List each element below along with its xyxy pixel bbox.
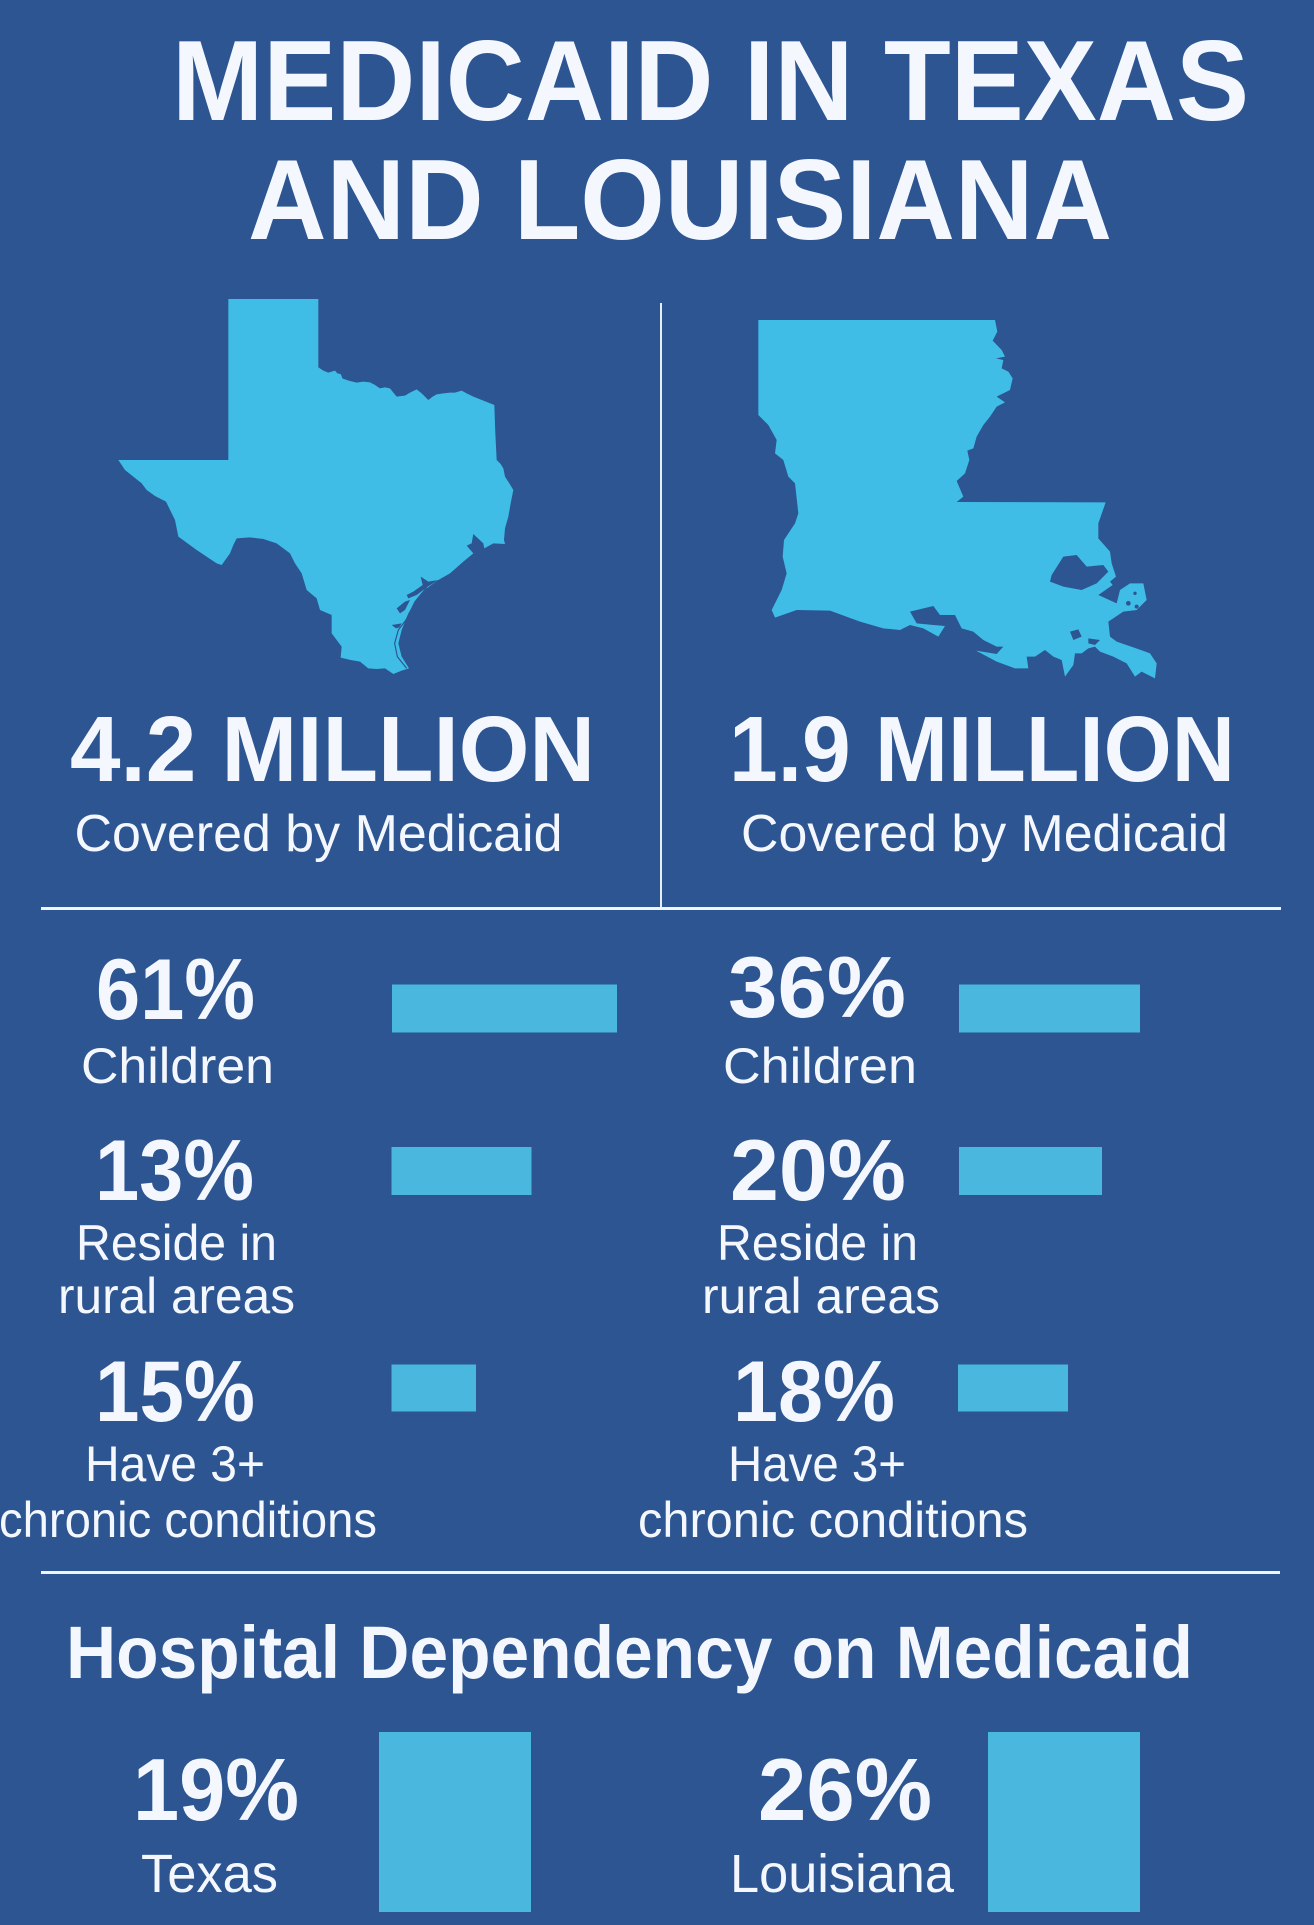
- title: [172, 18, 1249, 264]
- label: Texas coverage: Covered by Medicaid: [74, 805, 562, 863]
- label: Texas children: Children: [81, 1038, 274, 1094]
- bar: Louisiana chronic conditions: [958, 1364, 1068, 1412]
- stat: Louisiana coverage: 1.9 MILLION: [729, 697, 1235, 801]
- label: Louisiana rural: Reside in: [717, 1215, 918, 1271]
- bar: Texas hospital: [379, 1732, 531, 1912]
- panel: Louisiana hospital dependency: [730, 1732, 1140, 1912]
- stat: Louisiana chronic conditions: 18%: [733, 1344, 895, 1440]
- label: Louisiana chronic conditions: Have 3+: [728, 1436, 906, 1492]
- icon: Louisiana map: [758, 320, 1157, 678]
- panel: Louisiana demographics: [638, 940, 1140, 1548]
- panel: Texas hospital dependency: [133, 1732, 531, 1912]
- bar: Texas rural: [392, 1147, 532, 1195]
- heading: hospital dependency: Hospital Dependency on Medicaid: [66, 1611, 1193, 1694]
- bar: Louisiana hospital: [988, 1732, 1140, 1912]
- stat: Texas coverage: 4.2 MILLION: [70, 697, 595, 801]
- panel: Louisiana: [729, 320, 1235, 863]
- label: Texas chronic conditions: Have 3+: [85, 1436, 265, 1492]
- label: Texas rural: Reside in: [76, 1215, 277, 1271]
- bar: Louisiana children: [959, 984, 1140, 1032]
- label: Louisiana rural: [702, 1215, 940, 1324]
- label: Texas chronic conditions: [0, 1436, 377, 1548]
- bar: Louisiana rural: [959, 1147, 1102, 1195]
- Lake Pontchartrain: [1050, 555, 1108, 590]
- bar: Texas children: [392, 984, 617, 1032]
- title: AND LOUISIANA: [248, 137, 1112, 264]
- label: Texas chronic conditions: chronic conditions: [0, 1492, 377, 1548]
- label: Louisiana chronic conditions: chronic conditions: [638, 1492, 1028, 1548]
- label: Louisiana children: Children: [723, 1038, 917, 1094]
- stat: Texas children: 61%: [96, 942, 255, 1038]
- stat: Texas rural: 13%: [95, 1123, 254, 1219]
- stat: Texas chronic conditions: 15%: [95, 1344, 255, 1440]
- label: Louisiana chronic conditions: [638, 1436, 1028, 1548]
- label: Louisiana coverage: Covered by Medicaid: [741, 805, 1228, 863]
- stat: Louisiana children: 36%: [728, 940, 906, 1036]
- bar: Texas chronic conditions: [392, 1364, 476, 1412]
- stat: Louisiana hospital: 26%: [758, 1740, 932, 1839]
- stat: Texas hospital: 19%: [133, 1740, 299, 1839]
- title: MEDICAID IN TEXAS: [172, 18, 1249, 145]
- panel: Texas demographics: [0, 942, 617, 1548]
- label: Louisiana hospital: Louisiana: [730, 1844, 955, 1904]
- label: Louisiana rural: rural areas: [702, 1268, 940, 1324]
- stat: Louisiana rural: 20%: [730, 1123, 906, 1219]
- label: Texas rural: rural areas: [58, 1268, 295, 1324]
- label: Texas hospital: Texas: [141, 1844, 278, 1904]
- label: Texas rural: [58, 1215, 295, 1324]
- panel: Texas: [70, 299, 595, 863]
- icon: Texas map: [118, 299, 513, 674]
